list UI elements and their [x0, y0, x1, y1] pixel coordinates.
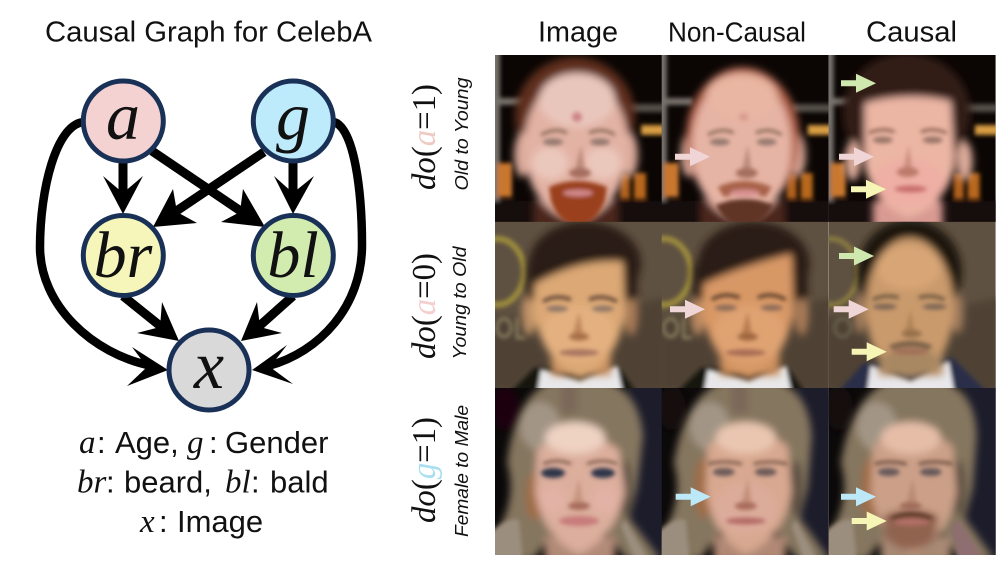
edge: a to x — [40, 122, 168, 386]
legend line: image: x — [139, 504, 155, 540]
legend line: beard and bald: beard, — [124, 464, 212, 500]
arrow: row 1 non-causal age — [675, 147, 710, 166]
face: row 3 causal, bearded long-haired man — [828, 388, 996, 555]
edge: g to bl — [274, 160, 314, 214]
arrow: row 2 causal bald — [839, 246, 874, 266]
face: row 2 original, young man — [495, 222, 662, 388]
legend line: age and gender: : — [97, 425, 106, 460]
legend — [77, 425, 329, 540]
arrow: row 1 causal beard — [851, 180, 886, 199]
edge: br to x — [123, 296, 179, 341]
face: row 1 causal, younger man with dark hair — [828, 55, 996, 222]
node: bl — [253, 216, 333, 296]
arrow: row 2 causal beard — [852, 342, 887, 361]
legend line: age and gender: : — [209, 425, 218, 460]
edge: bl to x — [241, 296, 293, 341]
arrow: row 3 causal beard — [852, 512, 887, 530]
legend line: beard and bald: bl — [225, 464, 251, 500]
face: row 2 causal, older balding man — [828, 222, 996, 389]
edge: a to bl — [152, 151, 265, 227]
face: row 1 original, older man with goatee — [495, 55, 662, 222]
arrow: row 1 causal bald — [841, 74, 876, 93]
edge: g to br — [153, 152, 264, 227]
column heading: Causal: Causal — [866, 16, 957, 48]
row label: do(a=0): do(a=0) — [406, 253, 443, 359]
row label: do(a=1): do(a=1) — [406, 84, 443, 190]
node: g — [253, 78, 333, 161]
row caption: Young to Old: Young to Old — [450, 245, 470, 359]
row label: do(g=1): do(g=1) — [406, 417, 443, 523]
face: row 1 non-causal, bald man with goatee — [662, 55, 829, 222]
arrow: row 1 causal age — [839, 147, 874, 166]
legend line: image: Image — [177, 504, 263, 539]
node: x — [169, 327, 249, 410]
face: row 3 original, blonde woman — [495, 388, 662, 555]
arrow: row 2 causal age — [834, 300, 869, 319]
face: row 3 non-causal, blended androgynous face — [662, 388, 829, 555]
node: x: x — [193, 327, 224, 403]
legend line: age and gender: Gender — [225, 425, 328, 460]
legend line: age and gender: g — [187, 425, 204, 461]
row caption: Old to Young: Old to Young — [452, 78, 472, 190]
row caption: Female to Male: Female to Male — [452, 405, 472, 537]
arrow: row 3 causal gender — [841, 487, 876, 506]
node: br — [83, 216, 163, 296]
node: g: g — [276, 78, 310, 154]
legend line: beard and bald: : — [106, 464, 115, 500]
node: br: br — [94, 219, 153, 292]
legend line: beard and bald: : — [251, 464, 260, 500]
legend line: beard and bald: br — [77, 464, 106, 500]
legend line: age and gender: Age, — [115, 425, 179, 460]
node: a — [83, 78, 163, 161]
arrow: row 2 non-causal age — [670, 300, 705, 319]
legend line: beard and bald: bald — [270, 464, 329, 500]
column heading: Non-Causal: Non-Causal — [668, 16, 806, 48]
legend line: age and gender: a — [79, 425, 96, 461]
column heading: Image: Image — [538, 16, 618, 48]
face: row 2 non-causal, young man with warmer skin — [662, 222, 829, 388]
legend line: image: : — [159, 504, 168, 539]
causal graph diagram — [40, 78, 362, 410]
title: causal graph: Causal Graph for CelebA — [45, 16, 373, 48]
edge: g to x — [252, 122, 362, 384]
arrow: row 3 non-causal gender — [676, 487, 711, 506]
edge: a to br — [103, 160, 143, 214]
node: a: a — [106, 78, 140, 154]
node: bl: bl — [267, 219, 319, 292]
